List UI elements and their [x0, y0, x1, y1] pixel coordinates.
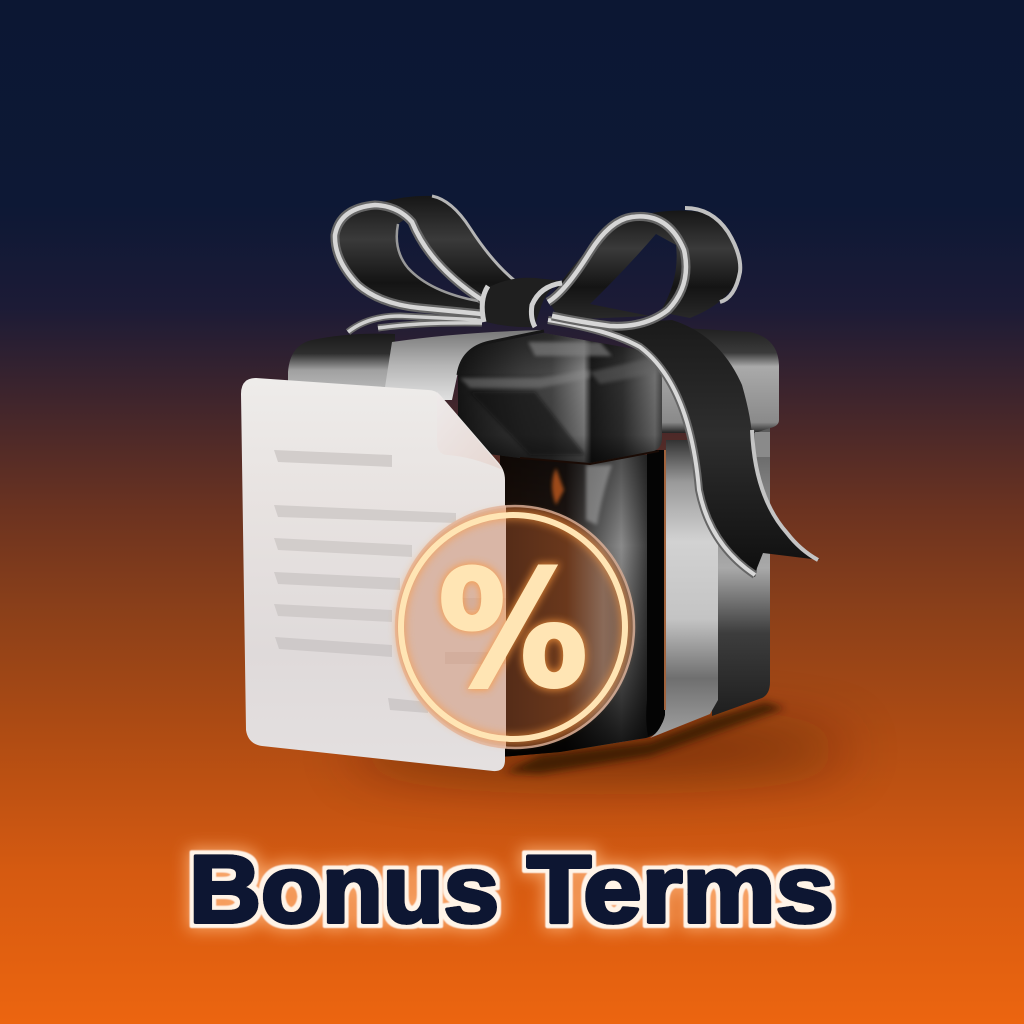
text line 4: [274, 572, 400, 590]
box body: vertical ribbon band: [650, 440, 718, 738]
percent badge: [390, 500, 641, 755]
title: Terms: [527, 836, 834, 943]
box body: right side panel: [712, 420, 770, 716]
glowing ring: [401, 515, 625, 739]
lid: right section: [650, 326, 779, 433]
text line 7: [388, 698, 428, 713]
title: Bonus: [189, 836, 499, 943]
gift box: [288, 316, 779, 757]
left loop back: [335, 196, 514, 320]
text line 6: [275, 637, 392, 657]
document sheet with folded corner: [241, 378, 505, 771]
percent badge: %: [438, 536, 588, 723]
ground shadow: [350, 702, 850, 776]
text line 1: [274, 450, 392, 467]
reflection on front panel: [552, 468, 564, 505]
title: [189, 836, 834, 943]
right loop silver edges: [548, 208, 740, 326]
right loop back: [548, 210, 741, 320]
strands behind bow: [348, 316, 482, 332]
folded corner: [437, 392, 503, 470]
text line 5: [274, 604, 392, 622]
ribbon silver outer edge: [548, 320, 755, 575]
bow: [335, 196, 741, 327]
document: [241, 378, 505, 771]
text line 2: [274, 505, 456, 523]
lid strap: [383, 330, 544, 400]
lid: back left section: [288, 334, 395, 400]
ribbon black body: [570, 320, 820, 577]
lid: front section: [458, 333, 662, 463]
hanging ribbon: [548, 320, 820, 577]
left loop silver edges: [335, 196, 514, 314]
frosted glass disc: [390, 500, 641, 755]
percent glyph: %: [438, 536, 588, 723]
ribbon silver tail edge: [752, 430, 818, 560]
text line 3: [274, 538, 412, 557]
box body: dark front panel: [500, 455, 664, 757]
knot: [483, 278, 563, 327]
